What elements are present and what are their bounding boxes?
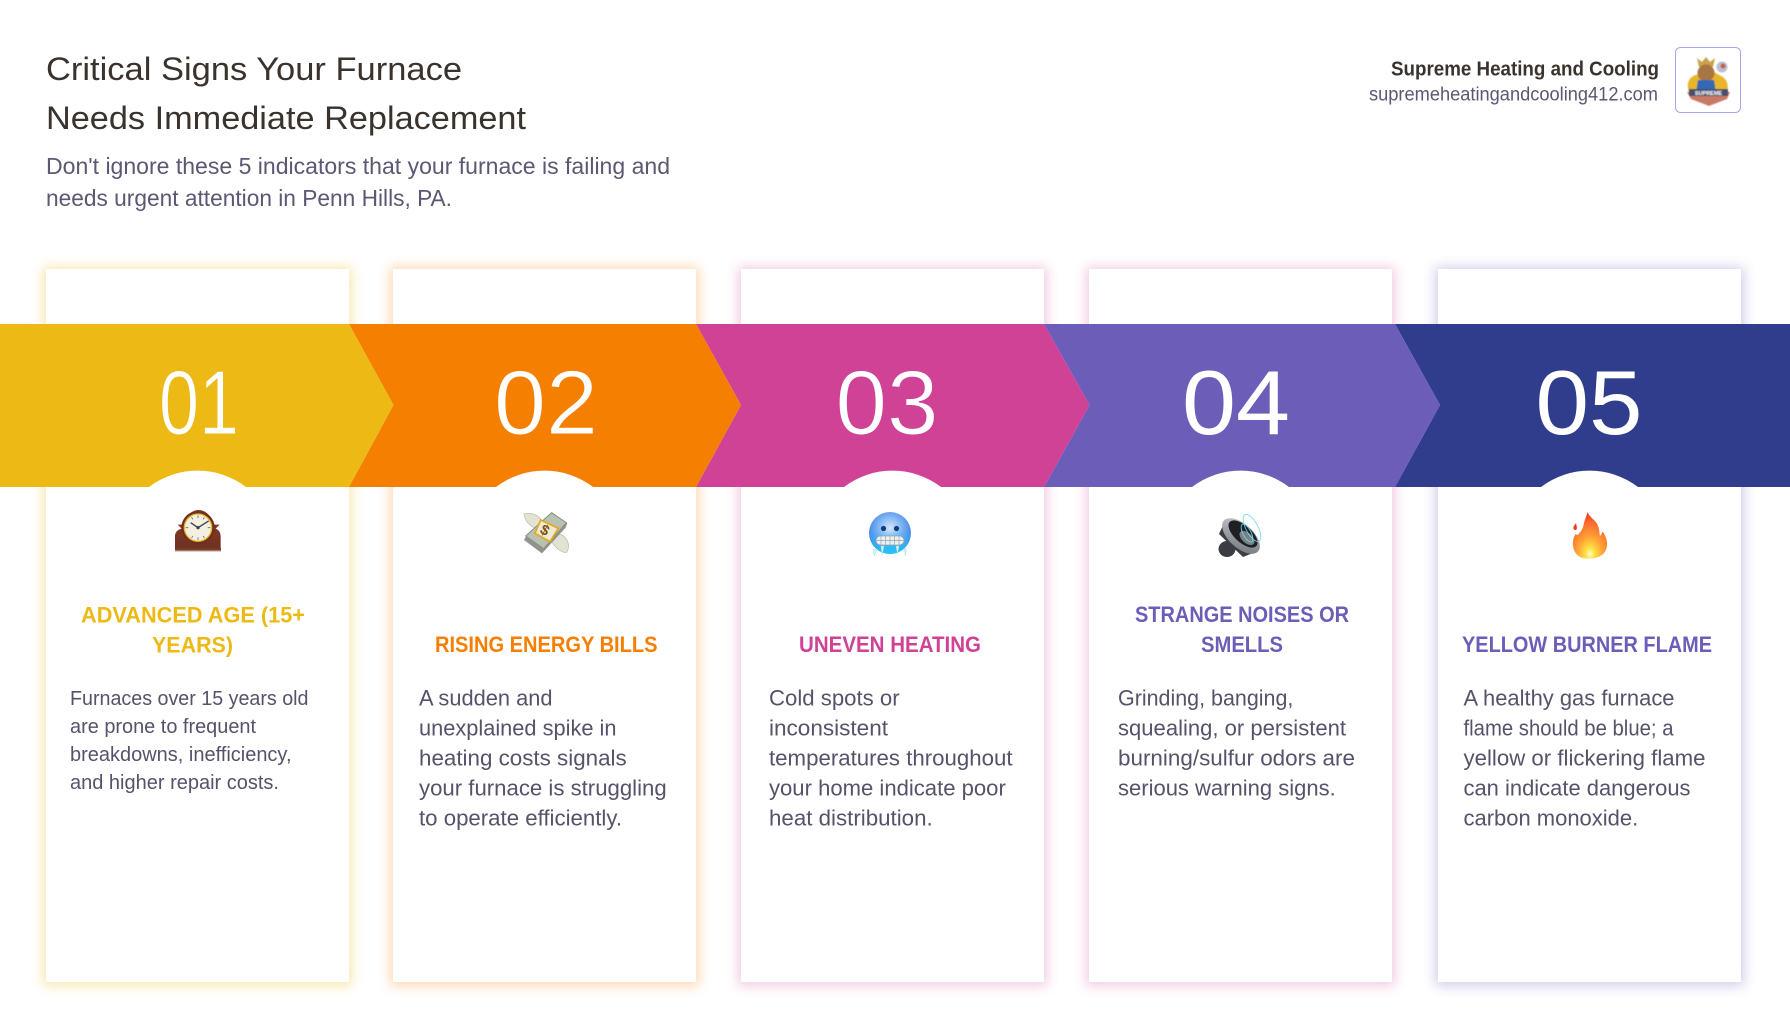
card 1 shadow: [43, 267, 352, 986]
number 02: 02: [494, 353, 598, 454]
brand name and website: Supreme Heating and Cooling: [1391, 58, 1659, 80]
body text: strange noises or smells: [1118, 686, 1355, 800]
body text: strange noises or smells: burning/sulfur odors are: [1118, 746, 1355, 770]
card 4 shadow: [1086, 267, 1395, 986]
brand name and website: [1369, 58, 1659, 106]
icon: flame: [1573, 512, 1607, 559]
body text: yellow burner flame: yellow or flickering flame: [1464, 746, 1706, 770]
icon: money with wings: [524, 513, 569, 553]
body text: uneven heating: your home indicate poor: [769, 776, 1006, 800]
heading: strange noises or smells: [1135, 602, 1349, 657]
white notch 01: [149, 471, 246, 487]
card 3 shadow: [738, 267, 1047, 986]
card 5 background: [1438, 269, 1741, 982]
card 3 background: [741, 269, 1044, 982]
subtitle: needs urgent attention in Penn Hills, PA.: [46, 185, 452, 211]
body text: advanced age: are prone to frequent: [70, 716, 256, 738]
body text: rising energy bills: to operate efficiently.: [419, 806, 622, 830]
heading: strange noises or smells: SMELLS: [1201, 632, 1283, 657]
heading: advanced age: ADVANCED AGE (15+: [81, 602, 305, 628]
body text: uneven heating: [769, 686, 1013, 830]
card 2 background: [393, 269, 696, 982]
number 01: 01: [159, 353, 239, 454]
panel: card 3: [738, 267, 1047, 986]
arrow band segment 03: [696, 324, 1090, 487]
brand name and website: supremeheatingandcooling412.com: [1369, 84, 1658, 106]
body text: strange noises or smells: Grinding, banging,: [1118, 686, 1293, 710]
icon: freezing face: [869, 512, 911, 556]
heading: strange noises or smells: STRANGE NOISES OR: [1135, 602, 1349, 627]
body text: advanced age: and higher repair costs.: [70, 772, 279, 794]
body text: rising energy bills: unexplained spike in: [419, 716, 616, 740]
subtitle: Don't ignore these 5 indicators that your furnace is failing and: [46, 153, 670, 179]
title: [46, 51, 526, 136]
body text: strange noises or smells: serious warning signs.: [1118, 776, 1336, 800]
heading: yellow burner flame: YELLOW BURNER FLAME: [1462, 632, 1712, 657]
white notch 02: [496, 471, 593, 487]
body text: uneven heating: heat distribution.: [769, 806, 933, 830]
panel: card 2: [390, 267, 699, 986]
heading: uneven heating: UNEVEN HEATING: [799, 632, 981, 657]
body text: yellow burner flame: A healthy gas furnace: [1464, 686, 1674, 710]
body text: yellow burner flame: [1464, 686, 1706, 830]
body text: advanced age: Furnaces over 15 years old: [70, 688, 308, 710]
white notch 03: [844, 471, 941, 487]
body text: rising energy bills: heating costs signals: [419, 746, 627, 770]
body text: uneven heating: Cold spots or: [769, 686, 900, 710]
body text: yellow burner flame: can indicate dangerous: [1464, 776, 1690, 800]
body text: rising energy bills: [419, 686, 667, 830]
white notch 04: [1192, 471, 1289, 487]
body text: uneven heating: inconsistent: [769, 716, 888, 740]
number 05: 05: [1536, 353, 1642, 454]
arrow band segment 05: [1395, 324, 1790, 487]
heading: advanced age: [81, 602, 305, 658]
icon: mantel clock: [175, 510, 221, 552]
body text: rising energy bills: your furnace is struggling: [419, 776, 667, 800]
arrow band segment 02: [349, 324, 741, 487]
panel: card 4: [1086, 267, 1395, 986]
title: Needs Immediate Replacement: [46, 100, 526, 136]
arrow band segment 01: [0, 324, 394, 487]
body text: uneven heating: temperatures throughout: [769, 746, 1013, 770]
logo badge: [1676, 48, 1740, 112]
number 04: 04: [1182, 353, 1290, 454]
icon: money with wings: $: [537, 522, 552, 540]
card 1 background: [46, 269, 349, 982]
body text: rising energy bills: A sudden and: [419, 686, 552, 710]
title: Critical Signs Your Furnace: [46, 51, 462, 87]
card 5 shadow: [1435, 267, 1744, 986]
body text: yellow burner flame: carbon monoxide.: [1464, 806, 1638, 830]
body text: advanced age: breakdowns, inefficiency,: [70, 744, 292, 766]
body text: strange noises or smells: squealing, or persistent: [1118, 716, 1346, 740]
body text: advanced age: [70, 688, 308, 794]
heading: advanced age: YEARS): [152, 632, 233, 658]
panel: card 1: [43, 267, 352, 986]
arrow band segment 04: [1044, 324, 1440, 487]
white notch 05: [1541, 471, 1638, 487]
card 4 background: [1089, 269, 1392, 982]
subtitle: [46, 153, 670, 211]
heading: rising energy bills: RISING ENERGY BILLS: [435, 632, 658, 657]
panel: card 5: [1435, 267, 1744, 986]
logo badge: SUPREME: [1695, 91, 1722, 97]
card 2 shadow: [390, 267, 699, 986]
number 03: 03: [836, 353, 938, 454]
body text: yellow burner flame: flame should be blue; a: [1464, 716, 1674, 740]
icon: loud speaker: [1216, 512, 1266, 560]
